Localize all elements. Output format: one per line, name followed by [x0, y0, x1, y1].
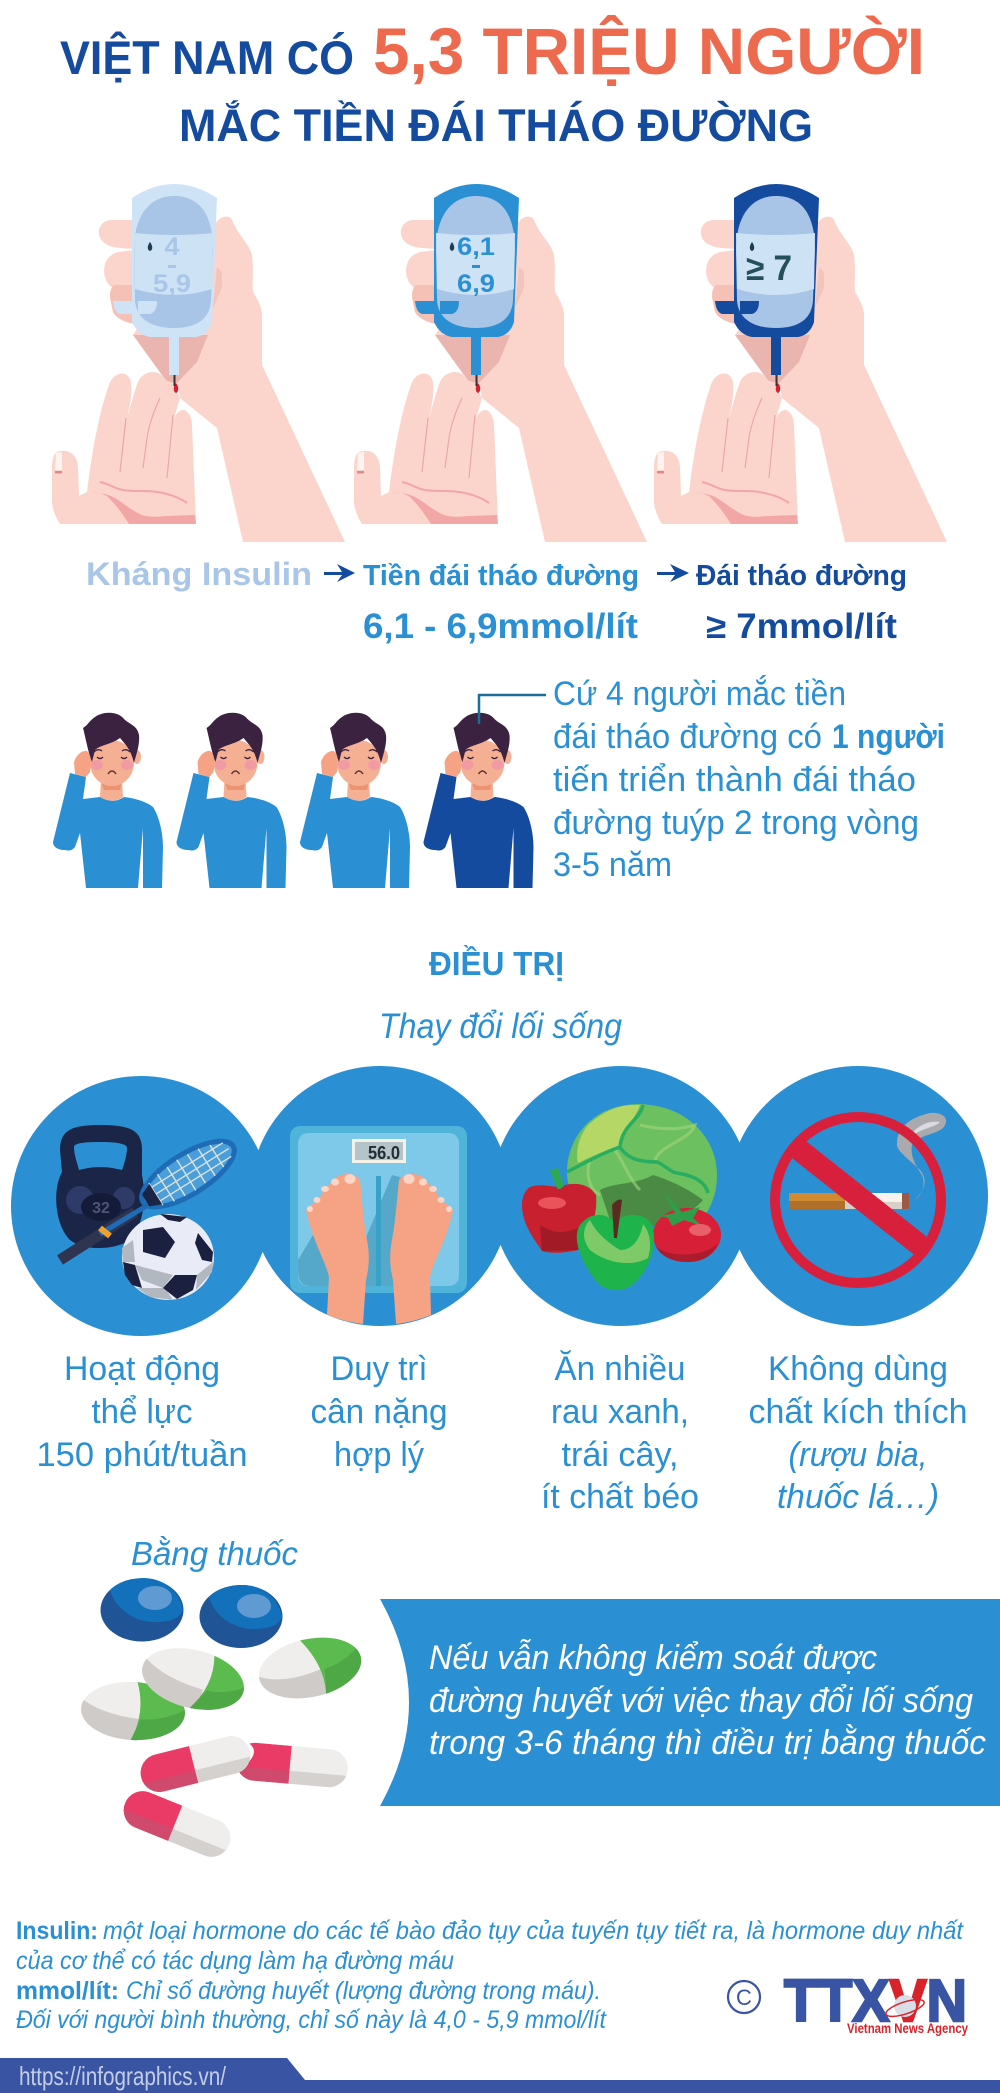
panel: vegetables circle: [491, 1066, 751, 1326]
label: weight: cân nặng: [310, 1393, 448, 1431]
label: diet: Ăn nhiều: [554, 1350, 686, 1388]
callout text: đái tháo đường có: [553, 718, 822, 756]
subheading: lifestyle change: Thay đổi lối sống: [379, 1007, 622, 1046]
label: exercise: [36, 1350, 248, 1474]
stage: insulin resistance: Kháng Insulin: [86, 556, 312, 592]
label: stimulants: thuốc lá…): [777, 1478, 939, 1516]
callout text: 1 người: [832, 718, 945, 756]
icon: kettlebell: 32: [92, 1200, 110, 1217]
lifestyle labels: [36, 1350, 968, 1516]
icon: tomato: [653, 1193, 721, 1262]
label: stimulants: Không dùng: [768, 1350, 948, 1388]
person 1: [53, 713, 163, 888]
wordmark: TTXVN: [784, 1968, 967, 2034]
icon: pink and white capsules: [124, 1736, 348, 1857]
footnotes: của cơ thể có tác dụng làm hạ đường máu: [16, 1947, 454, 1975]
icon: cigarette: [789, 1113, 946, 1209]
label: stimulants: [748, 1350, 968, 1516]
label: weight: Duy trì: [330, 1350, 428, 1388]
meter reading: 4: [164, 233, 180, 261]
note text: [429, 1639, 986, 1762]
heading: treatment: ĐIỀU TRỊ: [429, 945, 564, 982]
arrow: [324, 564, 355, 582]
meter reading: 6,9: [457, 270, 495, 298]
icon: prohibition sign: [775, 1117, 941, 1283]
meter reading: ≥ 7: [746, 249, 792, 288]
icon: right foot: [390, 1174, 453, 1324]
footnotes: Đối với người bình thường, chỉ số này là 4,0 - 5,9 mmol/lít: [16, 2006, 607, 2034]
meter reading: 6,1: [457, 233, 495, 261]
source url: https://infographics.vn/: [19, 2061, 227, 2091]
icon: bathroom scale: [290, 1126, 467, 1293]
panel: medication note: [380, 1599, 1000, 1806]
meter reading: 5,9: [153, 270, 191, 298]
person 2: [176, 713, 286, 888]
callout text: Cứ 4 người mắc tiền: [553, 675, 846, 713]
arrow: [657, 564, 689, 582]
callout text: [553, 675, 945, 884]
glucose meter illustration: insulin resistance, 4 - 5,9: [52, 184, 345, 542]
glucose meter illustration: diabetes, at least 7: [654, 184, 947, 542]
label: weight: [310, 1350, 448, 1474]
panel: exercise circle: [11, 1076, 271, 1336]
title: second line: MẮC TIỀN ĐÁI THÁO ĐƯỜNG: [179, 100, 813, 151]
stage: prediabetes: Tiền đái tháo đường: [363, 560, 639, 592]
globe emblem: [884, 1995, 926, 2020]
subheading: medication: Bằng thuốc: [131, 1535, 298, 1572]
note text: Nếu vẫn không kiểm soát được: [429, 1639, 877, 1677]
label: stimulants: chất kích thích: [748, 1393, 968, 1431]
copyright mark: C: [736, 1985, 752, 2010]
icon: apple: [577, 1200, 654, 1290]
agency name: Vietnam News Agency: [847, 2020, 968, 2036]
label: weight: hợp lý: [334, 1436, 424, 1474]
label: diet: ít chất béo: [541, 1478, 699, 1516]
callout leader line: [479, 695, 546, 724]
panel: body weight circle: [250, 1066, 510, 1326]
icon: pepper: [522, 1168, 596, 1253]
value: prediabetes range: 6,1 - 6,9mmol/lít: [363, 607, 638, 646]
pills illustration: [76, 1578, 375, 1863]
panel: no smoking circle: [728, 1066, 988, 1326]
label: diet: rau xanh,: [551, 1393, 689, 1431]
icon: left foot: [306, 1174, 369, 1324]
note text: trong 3-6 tháng thì điều trị bằng thuốc: [429, 1724, 986, 1762]
logo: TTXVN: [728, 1968, 968, 2036]
scale reading: 56.0: [368, 1143, 400, 1163]
callout text: 3-5 năm: [553, 846, 672, 884]
footnotes: Chỉ số đường huyết (lượng đường trong máu).: [126, 1977, 601, 2005]
label: exercise: 150 phút/tuần: [36, 1436, 248, 1474]
people row: one in four: [53, 695, 546, 888]
callout text: đường tuýp 2 trong vòng: [553, 804, 919, 842]
footnotes: mmol/lít:: [16, 1977, 119, 2005]
title: blue lead-in: VIỆT NAM CÓ: [60, 31, 354, 84]
person 4, highlighted: [424, 713, 534, 888]
icon: green and white tablets: [81, 1638, 362, 1740]
footnotes: Insulin:: [16, 1917, 98, 1945]
label: exercise: Hoạt động: [64, 1350, 220, 1388]
stage: diabetes: Đái tháo đường: [696, 560, 907, 592]
person 3: [300, 713, 410, 888]
label: stimulants: (rượu bia,: [788, 1436, 928, 1474]
icon: cabbage: [567, 1104, 717, 1226]
footnotes: một loại hormone do các tế bào đảo tụy của tuyến tụy tiết ra, là hormone duy nhất: [103, 1917, 964, 1945]
label: exercise: thể lực: [92, 1393, 192, 1431]
label: diet: trái cây,: [562, 1436, 678, 1474]
title: highlighted number: 5,3 TRIỆU NGƯỜI: [373, 14, 925, 88]
glucose meter illustration: prediabetes, 6,1 - 6,9: [354, 184, 647, 542]
footer band: [0, 2058, 1000, 2093]
icon: tennis racket: [60, 1129, 244, 1260]
meter reading: [457, 233, 495, 298]
title: [60, 14, 925, 151]
icon: football: [122, 1214, 214, 1300]
meter reading: [153, 233, 191, 298]
callout text: tiến triển thành đái tháo: [553, 761, 916, 799]
value: diabetes range: ≥ 7mmol/lít: [706, 607, 897, 646]
label: diet: [541, 1350, 699, 1516]
footnotes: [16, 1917, 964, 2034]
note text: đường huyết với việc thay đổi lối sống: [429, 1682, 973, 1720]
copyright mark: [728, 1981, 760, 2013]
progression stages: [86, 556, 907, 646]
icon: blue tablets: [100, 1578, 282, 1648]
icon: kettlebell: [56, 1125, 144, 1248]
